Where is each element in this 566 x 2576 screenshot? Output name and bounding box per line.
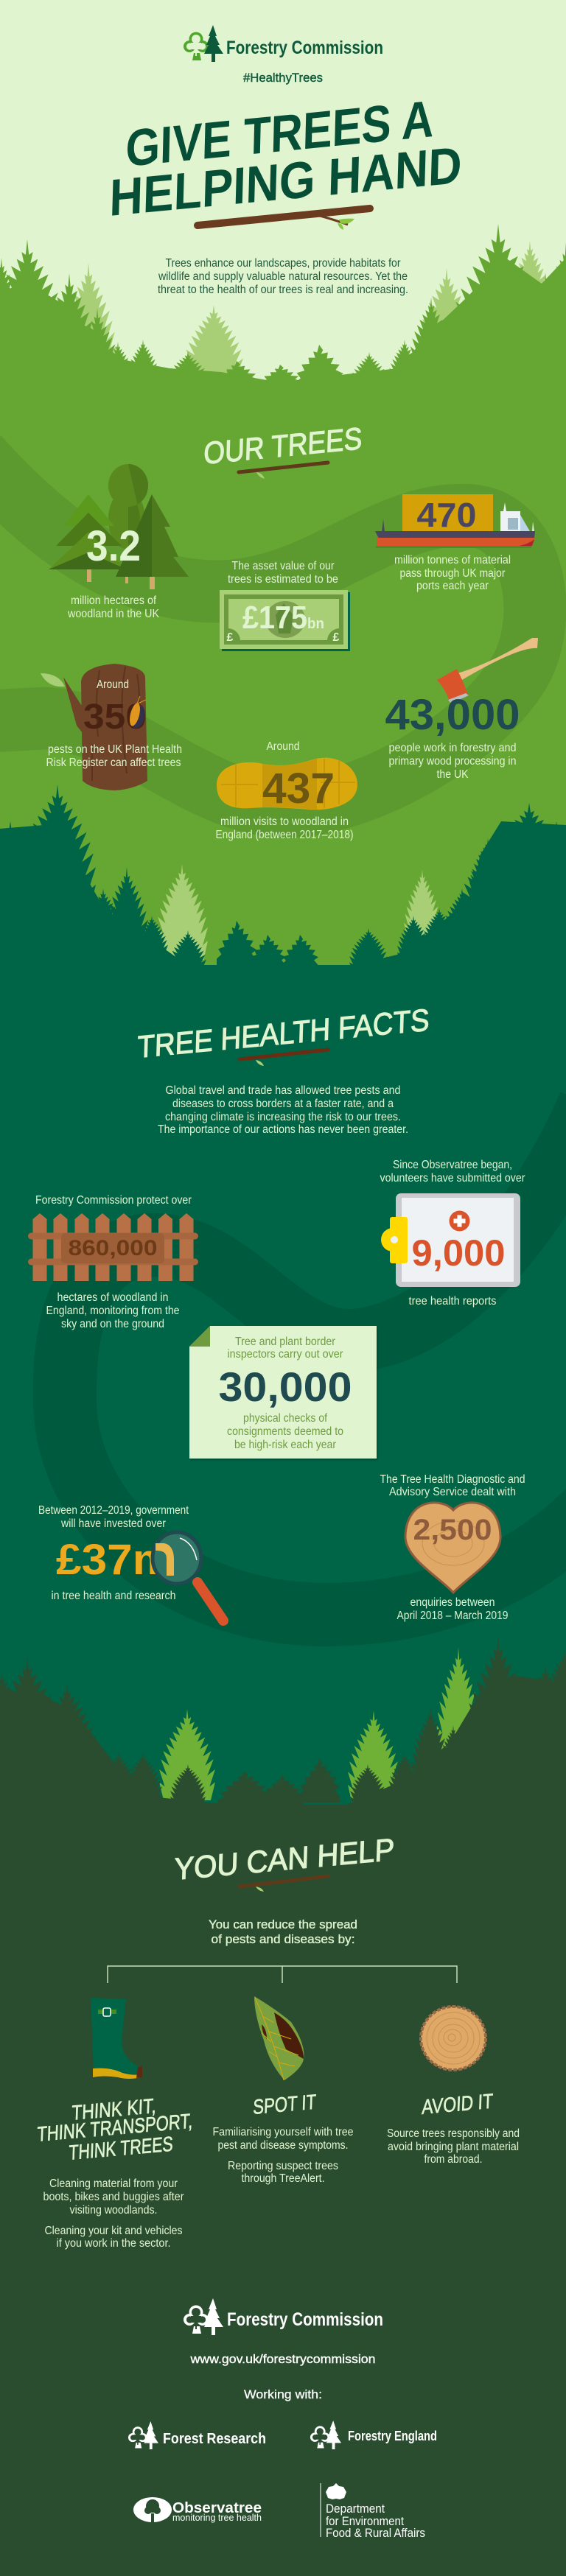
logo: Defra — [320, 2483, 425, 2540]
caption: checks — [227, 1412, 343, 1451]
stat: jobs — [385, 638, 538, 781]
number: 860,000: 860,000 — [68, 1236, 158, 1260]
intro text — [158, 257, 408, 296]
caption: research: in tree health and research — [52, 1590, 175, 1602]
connector: bracket — [108, 1966, 457, 1983]
caption: since observatree — [380, 1159, 525, 1185]
icon: container ship — [375, 494, 535, 548]
caption: pests: pests on the UK Plant Health — [48, 743, 182, 756]
caption: woodland: million hectares of — [71, 594, 157, 607]
logo: Forestry England: Forestry England — [348, 2429, 437, 2443]
logo: Forest Research: Forest Research — [163, 2431, 266, 2447]
number: 2,500: 2,500 — [413, 1514, 492, 1546]
title twig — [198, 208, 370, 230]
heading: think kit: THINK TRANSPORT, — [37, 2109, 193, 2146]
stat: observatree reports — [380, 1159, 525, 1308]
number: 470: 470 — [417, 496, 476, 534]
website url: www.gov.uk/forestrycommission — [189, 2352, 376, 2366]
caption: hectares: sky and on the ground — [61, 1318, 164, 1330]
logo: Forestry Commission — [184, 25, 383, 62]
text: around: Around — [97, 678, 129, 691]
action: avoid it — [387, 2007, 520, 2166]
caption: jobs: people work in forestry and — [389, 742, 516, 754]
intro text: tree health facts: changing climate is increasing the risk to our trees. — [165, 1111, 401, 1123]
logo: Observatree: monitoring tree health — [172, 2512, 262, 2523]
text: spot it advice: Reporting suspect trees — [228, 2160, 338, 2172]
caption: checks: be high-risk each year — [234, 1439, 336, 1451]
stat: enquiries — [380, 1473, 525, 1622]
working with label: Working with: — [244, 2387, 322, 2401]
title — [109, 89, 463, 227]
icon: clipboard — [381, 1193, 520, 1287]
number: 175bn: £175 — [242, 600, 307, 636]
caption: ports: ports each year — [416, 580, 489, 592]
icon: wooden heart — [405, 1503, 500, 1593]
intro text: tree health facts: The importance of our actions has never been greater. — [158, 1123, 408, 1136]
heading: avoid it: AVOID IT — [422, 2089, 494, 2119]
caption: advisory service: Advisory Service dealt with — [389, 1486, 516, 1498]
caption: asset value — [228, 560, 338, 586]
intro text: wildlife and supply valuable natural resources. Yet the — [158, 270, 408, 283]
text: spot it advice — [212, 2126, 354, 2185]
caption: hectares: hectares of woodland in — [57, 1291, 168, 1304]
caption: visits: England (between 2017–2018) — [215, 829, 354, 841]
caption: woodland: woodland in the UK — [67, 608, 160, 620]
caption: jobs: the UK — [436, 768, 469, 781]
stat: investment — [38, 1504, 223, 1621]
caption: since observatree: Since Observatree began, — [393, 1159, 512, 1171]
caption: between: Between 2012–2019, government — [38, 1504, 189, 1517]
stat: pests — [41, 664, 182, 790]
logo: Defra: Food & Rural Affairs — [326, 2527, 425, 2540]
number: 175bn — [227, 600, 340, 644]
heading twig: you can help — [240, 1876, 328, 1892]
caption: inspectors — [227, 1336, 343, 1361]
caption: hectares: England, monitoring from the — [46, 1305, 180, 1317]
stat: port tonnage — [375, 494, 535, 592]
caption: visits — [215, 815, 354, 841]
number: 175bn: £ — [333, 631, 340, 644]
text: around visits: Around — [267, 740, 299, 753]
text: spot it advice: Familiarising yourself with tree — [212, 2126, 354, 2138]
text: think kit advice: Cleaning your kit and vehicles — [44, 2225, 183, 2237]
text: think kit advice: boots, bikes and buggies after — [43, 2191, 184, 2203]
caption: protect over: Forestry Commission protect over — [35, 1194, 192, 1207]
caption: jobs: primary wood processing in — [389, 755, 516, 768]
icon: axe — [437, 638, 538, 703]
caption: reports: tree health reports — [408, 1295, 497, 1308]
background: pale sky section — [0, 0, 566, 413]
heading: think kit: THINK KIT, — [71, 2094, 156, 2124]
stat: asset value — [220, 560, 350, 651]
logo: Forestry England — [310, 2421, 437, 2449]
text: avoid it advice: avoid bringing plant material — [388, 2141, 519, 2153]
text: spot it advice: pest and disease symptoms. — [218, 2139, 348, 2152]
logo: Defra: for Environment — [326, 2515, 404, 2528]
icon: diseased leaf — [254, 1996, 304, 2080]
panel: border inspections note — [189, 1326, 377, 1459]
swoosh path: our trees — [0, 457, 535, 807]
caption: asset value: The asset value of our — [231, 560, 335, 572]
text: think kit advice — [43, 2177, 184, 2250]
intro text: threat to the health of our trees is real and increasing. — [158, 284, 408, 296]
caption: inspectors: Tree and plant border — [235, 1336, 335, 1348]
heading twig: our trees — [239, 463, 328, 479]
title: HELPING HAND — [109, 136, 463, 227]
stat: woodland hectares — [49, 464, 189, 620]
icon: wellington boot — [91, 1998, 142, 2079]
caption: ports — [394, 554, 511, 592]
background: mid green section — [0, 390, 566, 980]
text: think kit advice: visiting woodlands. — [69, 2204, 158, 2217]
hashtag: #HealthyTrees — [243, 71, 323, 85]
forest treeline: light green — [0, 224, 566, 416]
text: think kit advice: if you work in the sector. — [56, 2237, 171, 2250]
intro text: tree health facts — [158, 1084, 408, 1136]
number: 37m: £37m — [56, 1536, 173, 1584]
heading: our trees: OUR TREES — [203, 421, 363, 471]
caption: inspectors: inspectors carry out over — [227, 1348, 343, 1361]
note fold — [189, 1326, 210, 1347]
number: 350: 350 — [83, 698, 147, 737]
title: GIVE TREES A — [125, 89, 435, 178]
caption: between: will have invested over — [60, 1517, 166, 1530]
logo: Defra: Department — [326, 2502, 385, 2516]
stat: woodland protected — [28, 1194, 198, 1330]
heading: think kit: THINK TREES — [69, 2133, 173, 2164]
number: 175bn: bn — [307, 616, 324, 632]
icon: boot print — [217, 758, 357, 810]
caption: ports: million tonnes of material — [394, 554, 511, 566]
caption: visits: million visits to woodland in — [220, 815, 349, 828]
background: dark green section — [0, 965, 566, 1812]
number: 30,000: 30,000 — [218, 1364, 352, 1410]
heading: think kit — [37, 2094, 193, 2164]
caption: hectares — [46, 1291, 180, 1330]
text: avoid it advice — [387, 2127, 520, 2166]
stat: visits — [215, 740, 357, 841]
heading: tree health facts: TREE HEALTH FACTS — [137, 1002, 430, 1064]
icon: group of trees — [49, 464, 189, 589]
heading: you can help: YOU CAN HELP — [174, 1832, 395, 1887]
swoosh path: tree health facts — [65, 1105, 566, 1615]
note paper — [189, 1326, 377, 1459]
caption: enquiries: enquiries between — [410, 1596, 495, 1609]
icon: tree rings — [421, 2007, 486, 2070]
logo: Forestry Commission: Forestry Commission — [226, 38, 383, 58]
number: 437: 437 — [262, 765, 335, 813]
icon: magnifying glass — [153, 1532, 223, 1621]
caption: advisory service — [380, 1473, 525, 1498]
footer logo: Forestry Commission — [184, 2298, 383, 2335]
footer logo: Forestry Commission: Forestry Commission — [227, 2309, 383, 2330]
caption: between — [38, 1504, 189, 1530]
caption: ports: pass through UK major — [399, 567, 506, 580]
subheading: reduce the spread — [209, 1917, 357, 1946]
heading: spot it: SPOT IT — [253, 2090, 317, 2119]
caption: enquiries — [396, 1596, 509, 1622]
text: think kit advice: Cleaning material from your — [49, 2177, 178, 2190]
number: 9,000: 9,000 — [411, 1232, 506, 1274]
text: avoid it advice: Source trees responsibly and — [387, 2127, 520, 2140]
icon: log with branch — [41, 664, 147, 790]
caption: since observatree: volunteers have submitted over — [380, 1172, 525, 1185]
logo: Observatree — [133, 2497, 262, 2523]
intro text: Trees enhance our landscapes, provide habitats for — [165, 257, 401, 270]
background: darkest green section — [0, 1805, 566, 2576]
caption: checks: consignments deemed to — [227, 1425, 343, 1438]
icon: banknote — [220, 590, 350, 651]
caption: jobs — [389, 742, 516, 781]
caption: advisory service: The Tree Health Diagnostic and — [380, 1473, 525, 1486]
number: 3.2: 3.2 — [86, 522, 141, 570]
intro text: tree health facts: diseases to cross borders at a faster rate, and a — [172, 1098, 394, 1110]
caption: pests: Risk Register can affect trees — [46, 757, 181, 769]
subheading: reduce the spread: of pests and diseases by: — [211, 1932, 355, 1946]
logo: Observatree: Observatree — [172, 2500, 262, 2516]
icon: wooden fence — [28, 1213, 198, 1281]
number: 43,000: 43,000 — [385, 691, 520, 739]
caption: asset value: trees is estimated to be — [228, 573, 338, 586]
caption: pests — [46, 743, 182, 769]
logo: Forest Research — [128, 2421, 266, 2449]
number: 175bn: £ — [227, 631, 234, 644]
text: spot it advice: through TreeAlert. — [242, 2172, 324, 2185]
caption: woodland — [67, 594, 160, 620]
subheading: reduce the spread: You can reduce the spread — [209, 1917, 357, 1931]
caption: checks: physical checks of — [243, 1412, 328, 1425]
action: think kit — [37, 1998, 193, 2250]
heading twig: tree health facts — [240, 1050, 328, 1066]
action: spot it — [212, 1996, 354, 2185]
caption: enquiries: April 2018 – March 2019 — [396, 1610, 509, 1622]
forest treeline: darkest green — [0, 1635, 566, 1812]
icon: beetle — [127, 696, 147, 730]
intro text: tree health facts: Global travel and trade has allowed tree pests and — [165, 1084, 401, 1097]
text: avoid it advice: from abroad. — [424, 2153, 482, 2166]
forest treeline: dark green — [0, 785, 566, 975]
